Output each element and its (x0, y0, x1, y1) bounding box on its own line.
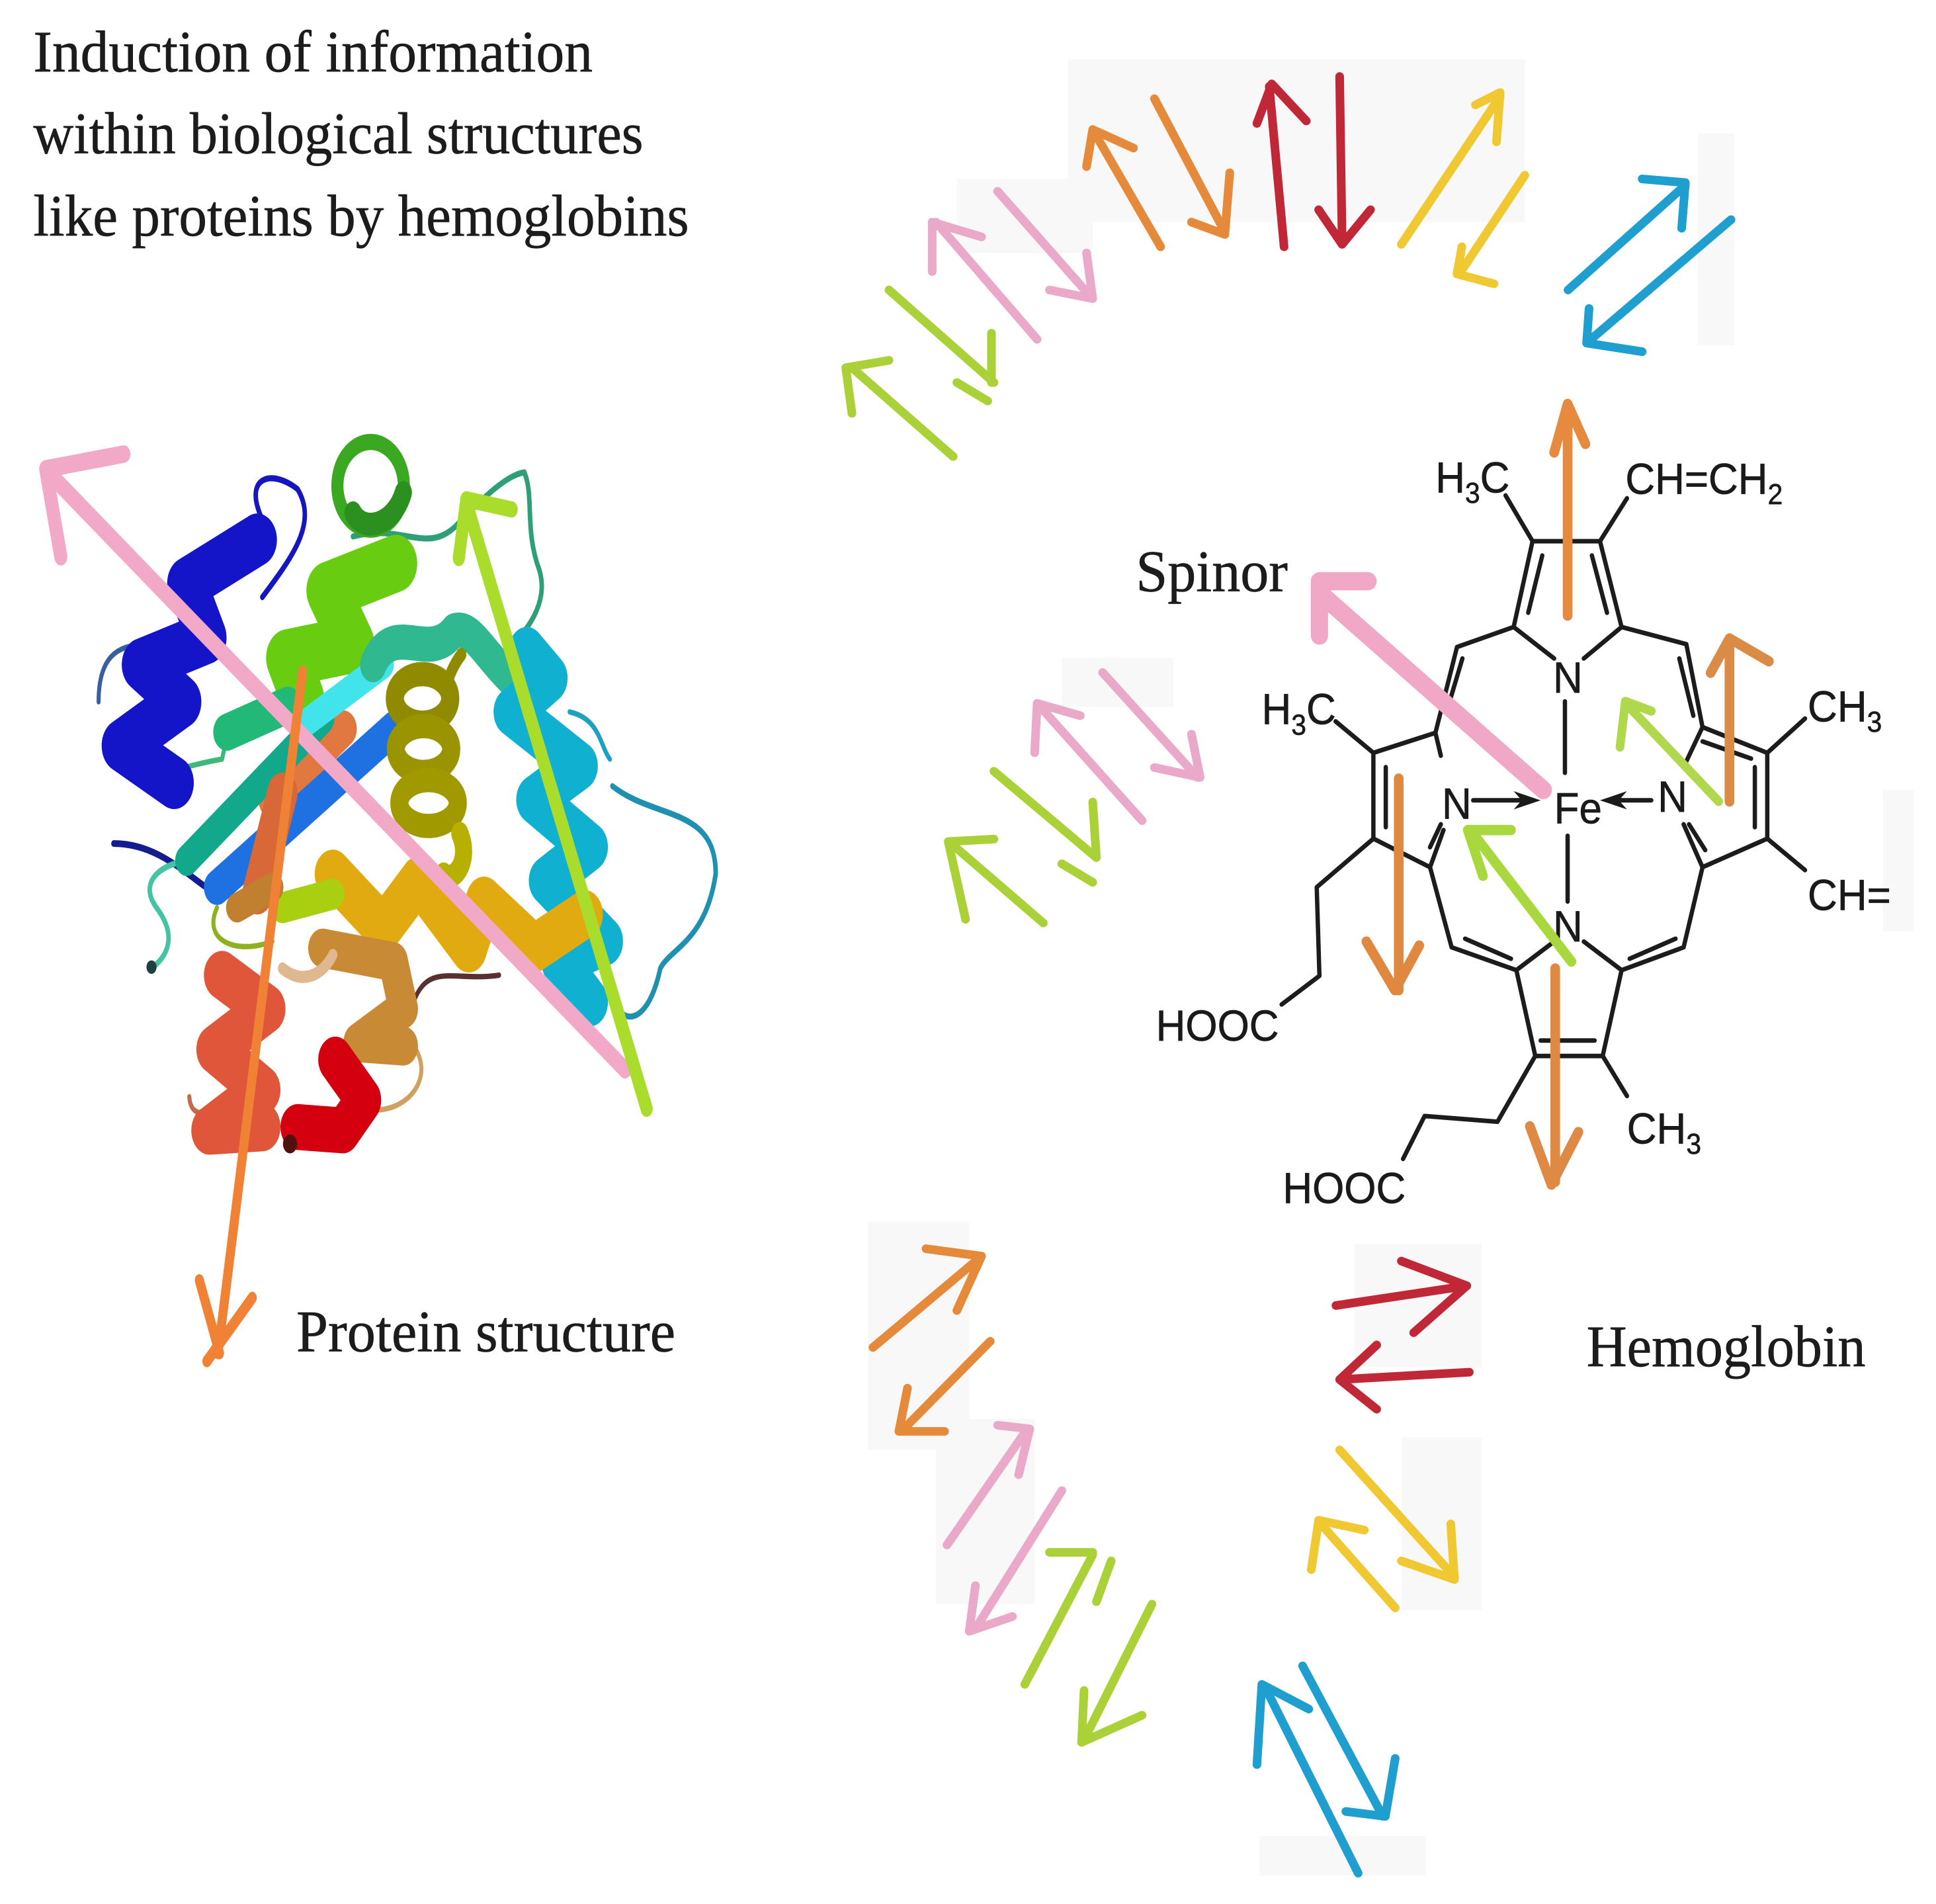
atom labels: Fe (1554, 784, 1602, 833)
arrow pair: red (1257, 77, 1370, 247)
atom labels: 3 (1686, 1128, 1701, 1160)
arrow pair: orange (1087, 99, 1230, 247)
arrow: orange left (1367, 779, 1419, 990)
arrow pair: blue (1568, 179, 1731, 352)
title: within biological structures (33, 101, 644, 166)
atom labels: 3 (1465, 477, 1480, 509)
arrow pair: pink (1034, 673, 1200, 820)
atom labels: 3 (1867, 706, 1882, 738)
heme molecule (1156, 453, 1891, 1213)
arrow: orange top (1554, 404, 1585, 615)
arrow: lime right (1620, 701, 1718, 801)
atom labels: HOOC (1283, 1164, 1406, 1213)
arrow pair: lime (1025, 1552, 1152, 1743)
atom labels: N (1553, 902, 1583, 951)
arrow: orange bottom (1530, 969, 1578, 1185)
protein structure label: Protein structure (296, 1299, 675, 1364)
arrow pair: yellow (1311, 1450, 1454, 1608)
atom labels: 2 (1768, 478, 1783, 510)
atom labels: H (1262, 685, 1291, 734)
arrow: orange (199, 671, 303, 1362)
atom labels: CH (1627, 1104, 1686, 1153)
molecular skeleton (1282, 496, 1805, 1159)
arrow pair: yellow (1402, 93, 1525, 284)
arrow: pink (46, 454, 625, 1070)
atom labels: HOOC (1156, 1001, 1279, 1050)
spinor arrows over heme (1320, 404, 1769, 1185)
arrow: lime (459, 499, 647, 1109)
atom labels: H (1435, 453, 1465, 502)
atom labels: C (1480, 453, 1509, 502)
hemoglobin label: Hemoglobin (1587, 1314, 1866, 1379)
spinor label: Spinor (1136, 539, 1288, 604)
atom labels (1156, 453, 1891, 1213)
arrow pair: lime (846, 290, 994, 456)
title: Induction of information (33, 19, 593, 85)
atom labels: CH= (1808, 871, 1891, 920)
iron bond arrowheads (1513, 791, 1627, 810)
title: like proteins by hemoglobins (33, 183, 689, 249)
atom labels: N (1442, 779, 1472, 828)
atom labels: CH=CH (1625, 454, 1768, 503)
atom labels: CH (1808, 682, 1867, 731)
atom labels: 3 (1291, 709, 1306, 741)
atom labels: N (1553, 654, 1583, 703)
arrow pair: lime (948, 771, 1097, 923)
arrow: pink spinor (1320, 582, 1543, 790)
arrow pair: pink (947, 1425, 1062, 1631)
middle paired arrows (948, 673, 1200, 923)
protein ribbon structure (99, 442, 716, 1153)
arrow pair: pink (932, 191, 1093, 339)
protein spin arrows (46, 454, 647, 1362)
arc of paired arrows bottom (873, 1249, 1469, 1873)
atom labels: C (1306, 685, 1336, 734)
arrow: lime left (1468, 830, 1572, 962)
arrow pair: orange (873, 1249, 990, 1432)
atom labels: N (1658, 772, 1687, 821)
arrow: orange right (1710, 638, 1769, 801)
arc of paired arrows top (846, 77, 1731, 456)
title (33, 19, 689, 249)
arrow pair: blue (1257, 1666, 1395, 1873)
arrow pair: red (1336, 1261, 1469, 1409)
